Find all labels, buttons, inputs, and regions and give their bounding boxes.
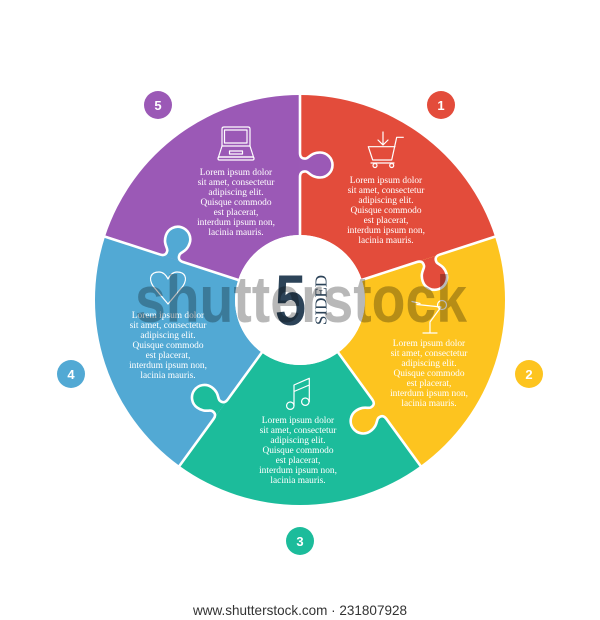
center circle — [235, 235, 365, 365]
text block: segment 5: Quisque commodo — [200, 198, 272, 208]
text block: segment 3: Quisque commodo — [262, 446, 334, 456]
icon: cocktail glass — [412, 300, 446, 333]
puzzle tab: blue into purple — [160, 224, 194, 262]
text block: segment 1: sit amet, consectetur — [348, 186, 425, 196]
number badge 5 — [144, 91, 172, 119]
text block: segment 4: est placerat, — [146, 351, 190, 361]
panel: purple segment — [105, 51, 341, 294]
number badge 3: 3 — [296, 534, 304, 549]
number badge 3 — [286, 527, 314, 555]
text block: segment 4: lacinia mauris. — [140, 371, 196, 381]
text block: segment 4: Lorem ipsum dolor — [132, 311, 205, 321]
text block: segment 2: lacinia mauris. — [401, 399, 457, 409]
text block: segment 5: interdum ipsum non, — [197, 218, 275, 228]
text block: segment 1: interdum ipsum non, — [347, 226, 425, 236]
panel: yellow segment — [319, 237, 555, 479]
panel: blue segment — [22, 202, 288, 466]
puzzle tab: red into yellow — [417, 254, 450, 293]
footer credit: www.shutterstock.com · 231807928 — [192, 602, 407, 618]
text block: segment 3: lacinia mauris. — [270, 476, 326, 486]
panel: green segment — [154, 316, 420, 580]
icon: laptop — [218, 127, 254, 160]
text block: segment 4: sit amet, consectetur — [130, 321, 207, 331]
text block: segment 2: interdum ipsum non, — [390, 389, 468, 399]
text block: segment 1: Lorem ipsum dolor — [350, 176, 423, 186]
text block: segment 1: adipiscing elit. — [358, 196, 414, 206]
number badge 5: 5 — [154, 98, 162, 113]
icon: heart — [151, 272, 185, 304]
number badge 1 — [427, 91, 455, 119]
puzzle tab: green into blue — [187, 380, 228, 419]
number badge 1: 1 — [437, 98, 445, 113]
text block: segment 5: Lorem ipsum dolor — [200, 168, 273, 178]
puzzle tab: purple into red — [300, 152, 332, 178]
text block: segment 2: adipiscing elit. — [401, 359, 457, 369]
icon: shopping cart — [368, 132, 403, 168]
center title: 5 sided: SIDED — [312, 275, 330, 325]
text block: segment 3: adipiscing elit. — [270, 436, 326, 446]
text block: segment 2: Lorem ipsum dolor — [393, 339, 466, 349]
text block: segment 1: est placerat, — [364, 216, 408, 226]
text block: segment 2: Quisque commodo — [393, 369, 465, 379]
text block: segment 4: Quisque commodo — [132, 341, 204, 351]
puzzle tab: yellow into green — [346, 399, 387, 438]
text block: segment 2: est placerat, — [407, 379, 451, 389]
text block: segment 1: lacinia mauris. — [358, 236, 414, 246]
text block: segment 3: est placerat, — [276, 456, 320, 466]
text block: segment 3: interdum ipsum non, — [259, 466, 337, 476]
number badge 2 — [515, 360, 543, 388]
number badge 2: 2 — [525, 367, 533, 382]
text block: segment 4: interdum ipsum non, — [129, 361, 207, 371]
text block: segment 3: sit amet, consectetur — [260, 426, 337, 436]
number badge 4 — [57, 360, 85, 388]
panel: red segment — [300, 95, 495, 280]
number badge 4: 4 — [67, 367, 75, 382]
text block: segment 4: adipiscing elit. — [140, 331, 196, 341]
icon: music notes — [287, 378, 309, 409]
text block: segment 1: Quisque commodo — [350, 206, 422, 216]
text block: segment 5: lacinia mauris. — [208, 228, 264, 238]
watermark: shutterstock — [135, 262, 467, 336]
text block: segment 5: sit amet, consectetur — [198, 178, 275, 188]
center title: 5 sided: 5 — [275, 262, 306, 341]
text block: segment 2: sit amet, consectetur — [391, 349, 468, 359]
text block: segment 3: Lorem ipsum dolor — [262, 416, 335, 426]
text block: segment 5: est placerat, — [214, 208, 258, 218]
text block: segment 5: adipiscing elit. — [208, 188, 264, 198]
